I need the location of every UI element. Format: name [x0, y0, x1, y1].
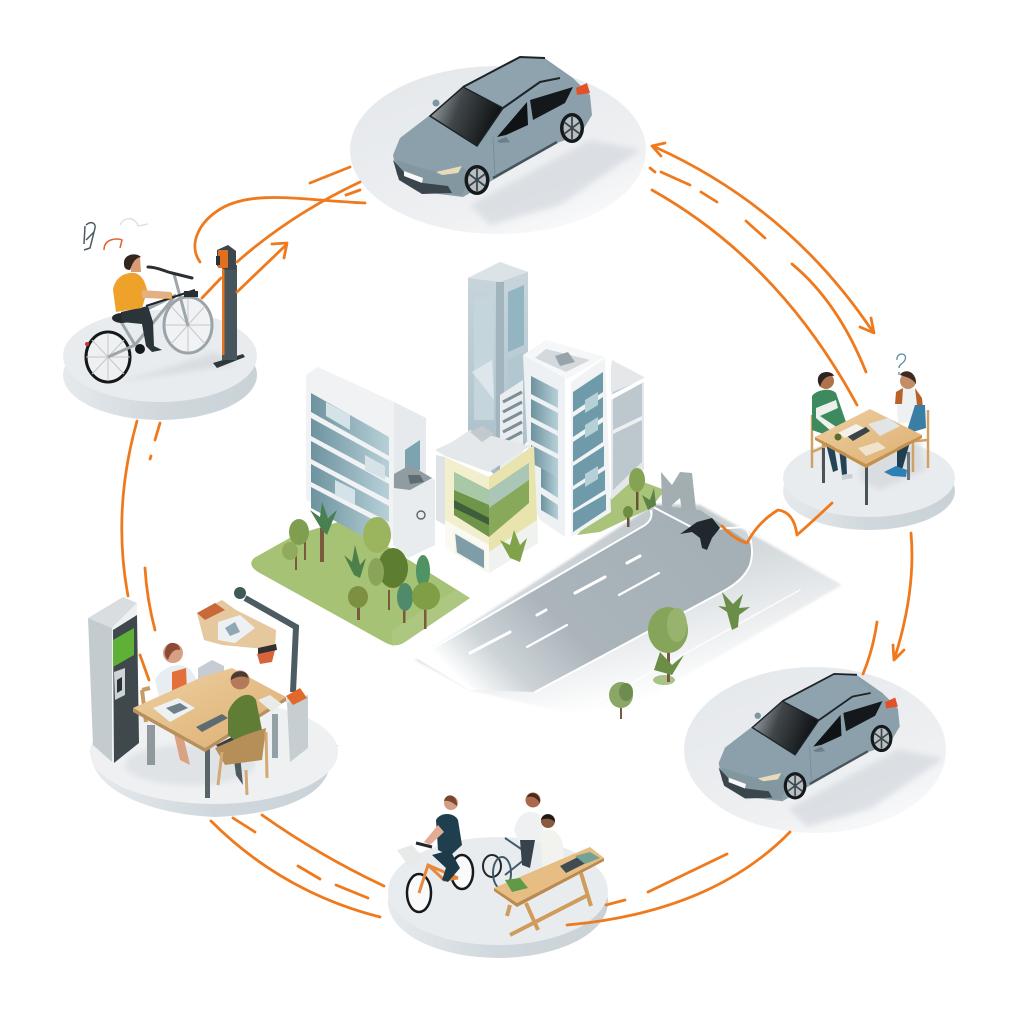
arrow: top car to right table	[650, 143, 874, 405]
panel: right car platform	[684, 667, 946, 833]
overhead arm and shelf	[197, 587, 296, 692]
seated woman	[142, 643, 205, 765]
panel: central city block	[251, 262, 842, 722]
black dog	[680, 518, 720, 550]
desk	[133, 668, 286, 752]
circular orange flow arrows	[122, 143, 912, 925]
picnic table	[494, 847, 604, 935]
right lawn trees	[623, 468, 656, 527]
road edge lines	[418, 508, 800, 720]
panel: bicycle and charging post platform	[63, 219, 257, 420]
yellow mixed-use building	[435, 426, 538, 573]
arrow: bicycle to top car	[195, 167, 365, 298]
cyclist with orange bike	[397, 795, 473, 912]
arrow: right car to bottom platform	[567, 832, 790, 925]
left white building	[306, 367, 426, 540]
glass tower	[468, 262, 528, 480]
squiggle link to dog	[722, 503, 832, 543]
road	[416, 505, 753, 692]
table legs	[147, 714, 278, 798]
panel: top car platform	[350, 57, 646, 234]
charger kiosk	[88, 597, 139, 763]
panel: right meeting table platform	[783, 354, 955, 530]
sculpture	[661, 472, 696, 512]
right person	[884, 354, 926, 477]
sidewalk	[415, 504, 842, 722]
cabinet	[283, 688, 308, 762]
road trees	[609, 592, 750, 719]
panel: left workspace platform	[88, 587, 338, 817]
arrow: right table to right car	[863, 533, 912, 674]
lawn left	[251, 520, 470, 645]
arrow: left workspace to bicycle	[122, 421, 160, 680]
table	[815, 409, 922, 505]
lawn right	[577, 477, 665, 535]
rear bike and cyclists	[483, 792, 565, 889]
chairs	[812, 410, 928, 472]
left person	[812, 372, 853, 480]
printer	[198, 660, 224, 687]
rider	[113, 254, 172, 352]
charging post	[213, 245, 245, 368]
arrow: bottom platform to left workspace	[211, 815, 384, 917]
tall white building	[523, 340, 611, 537]
lawn shrubs and trees	[282, 468, 656, 629]
white low stack behind	[500, 380, 523, 480]
white block beside left building	[393, 465, 435, 558]
rear right building	[611, 360, 644, 500]
seated man and chair	[215, 670, 267, 795]
panel: bottom bicycle and table platform	[388, 792, 608, 958]
musical notes	[84, 219, 148, 250]
bicycle	[85, 267, 212, 382]
